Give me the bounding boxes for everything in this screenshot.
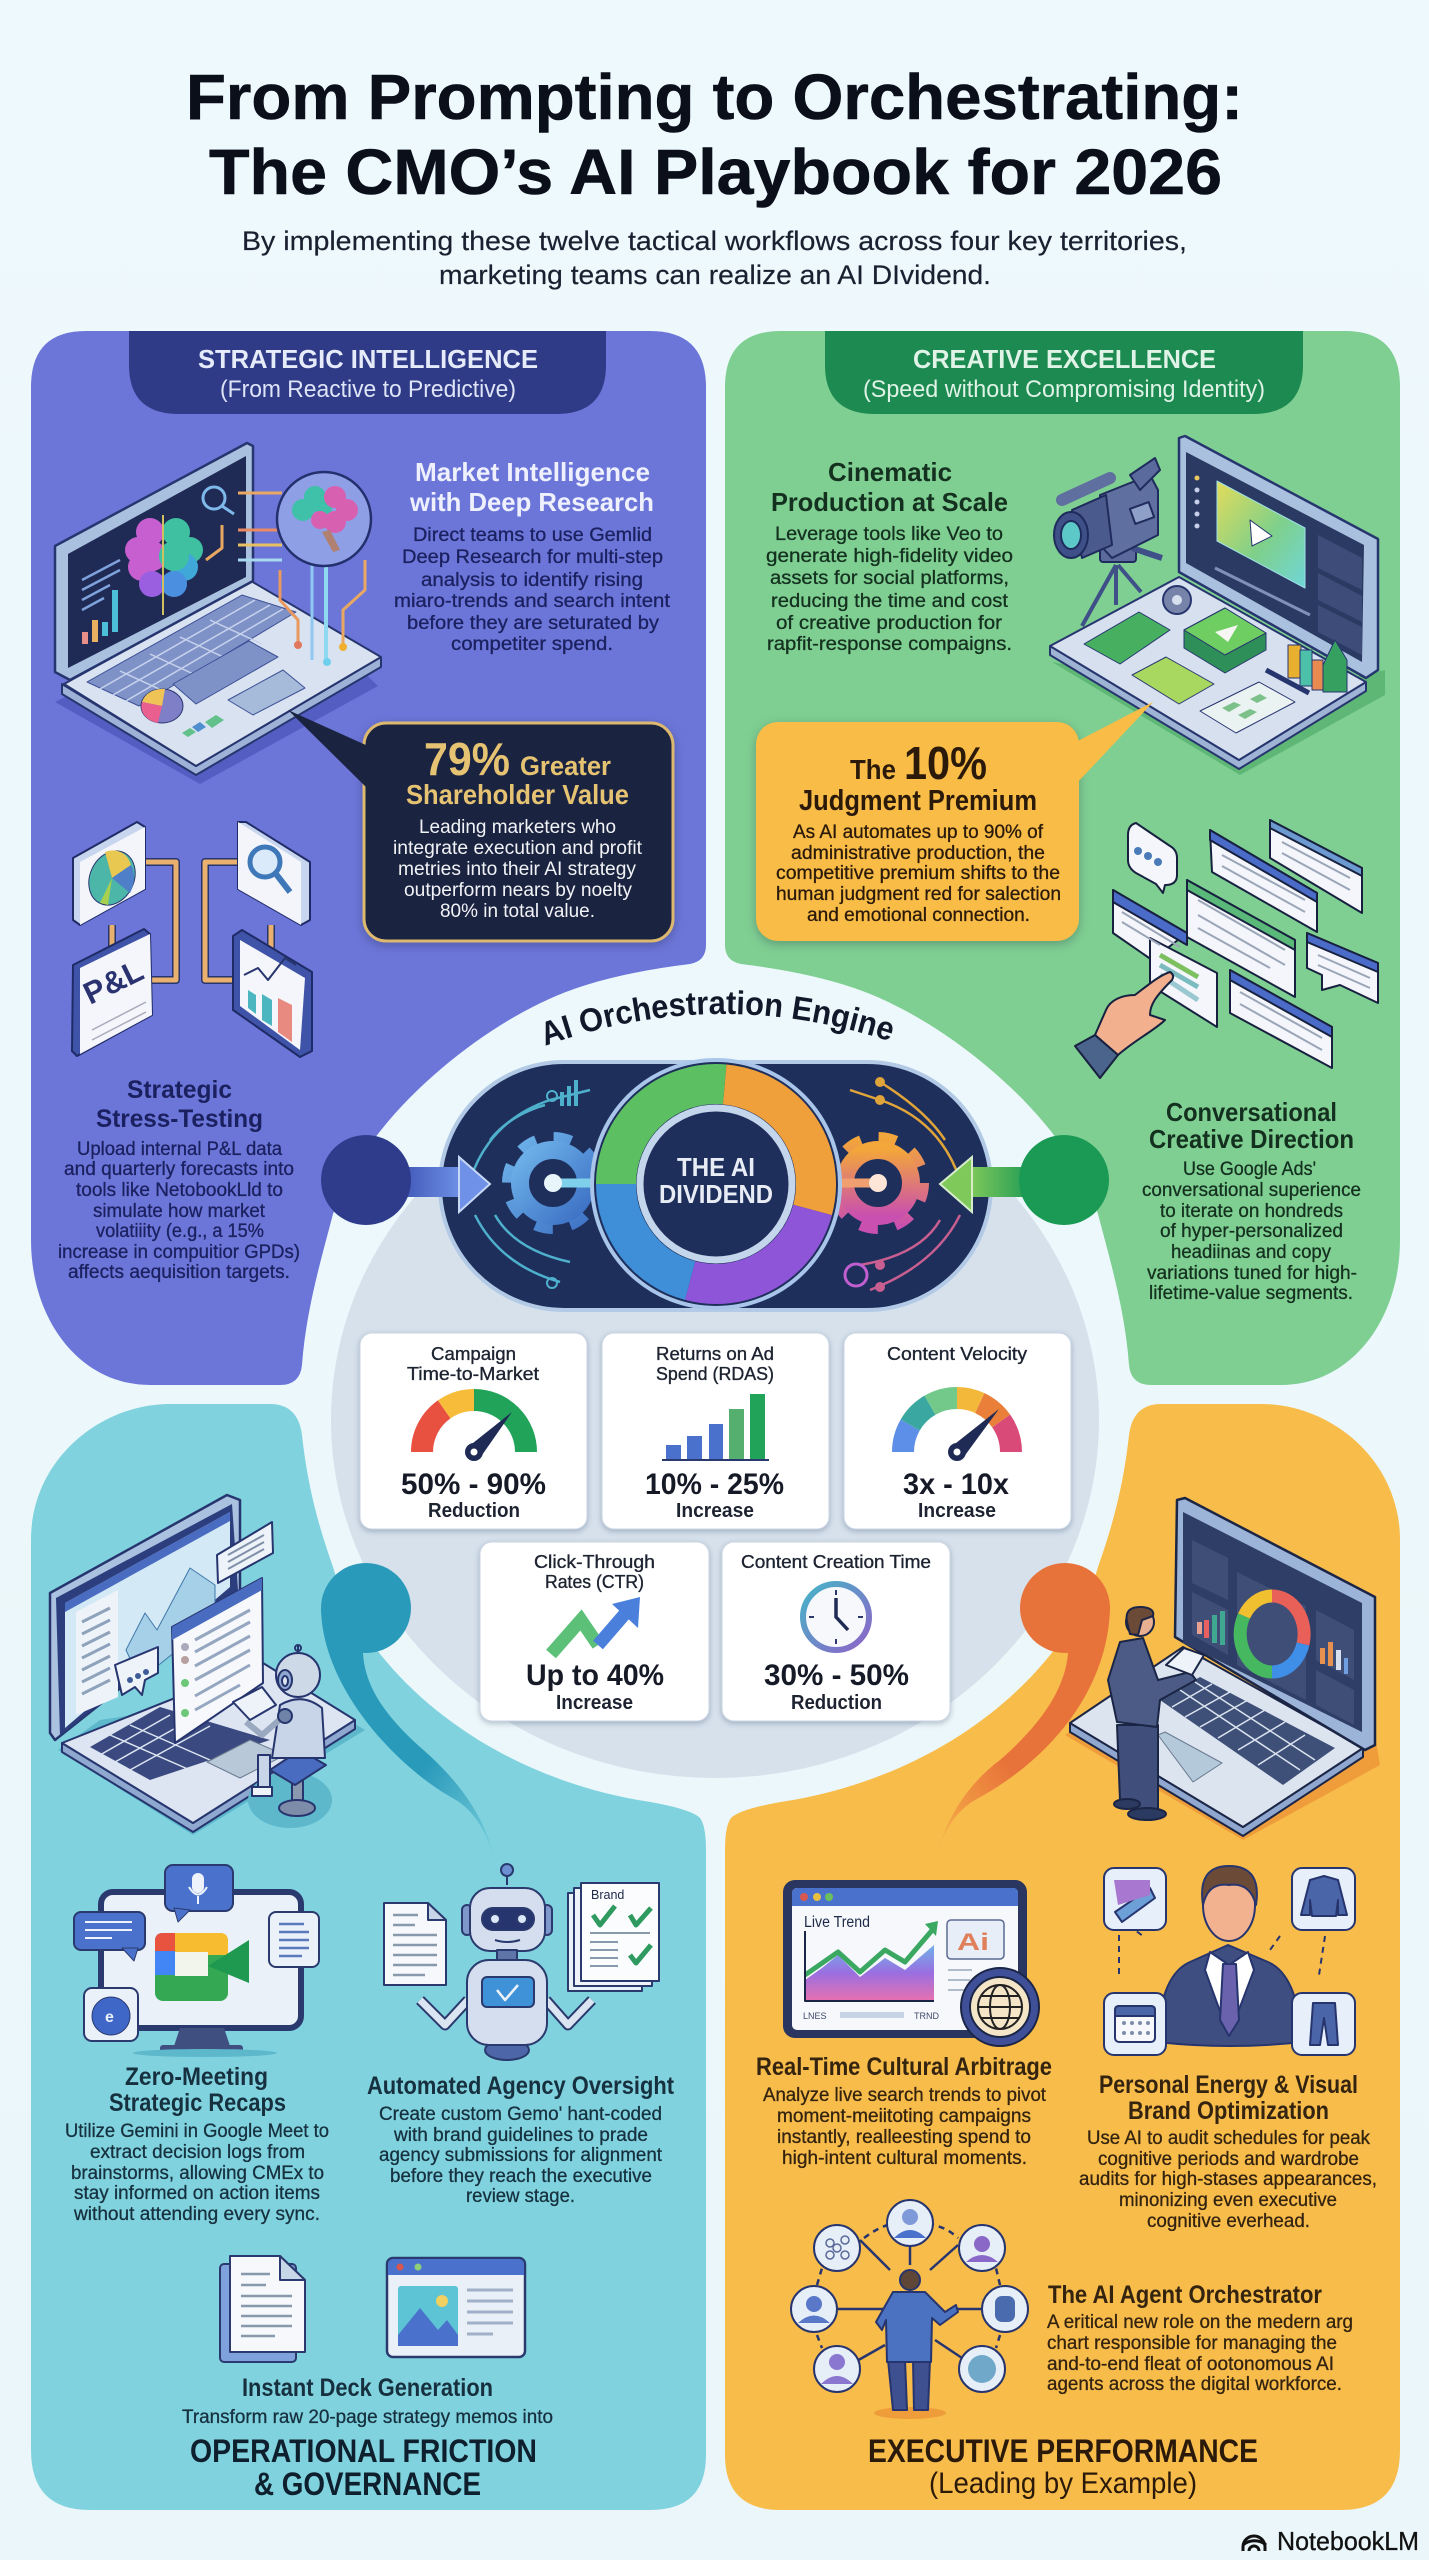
section: strategic stress-testing text: tools like NetobookLld to	[76, 1179, 283, 1201]
callout: 79% greater shareholder value: integrate execution and profit	[393, 838, 643, 859]
callout: 79% greater shareholder value: Shareholder Value	[406, 779, 629, 810]
stat card: content creation time: Content Creation Time	[741, 1552, 931, 1572]
ring: four-colour dividend ring: THE AI	[677, 1152, 755, 1182]
icon: P&L stress-testing network: P&L	[78, 953, 149, 1011]
icon: laptop with brain	[55, 443, 381, 784]
section: conversational creative direction text: conversational superience	[1142, 1179, 1361, 1201]
section: market intelligence text: analysis to identify rising	[421, 569, 643, 591]
section: ai agent orchestrator text	[1047, 2281, 1353, 2395]
icon: executive with schedule and wardrobe tiles	[1104, 1866, 1355, 2055]
panel: executive performance	[725, 1404, 1400, 2510]
section heading: operational friction: OPERATIONAL FRICTION	[190, 2433, 537, 2469]
icon: laptop with robot assistant	[50, 1495, 365, 1835]
section header: strategic intelligence	[129, 331, 606, 414]
section: instant deck generation text	[182, 2374, 553, 2428]
icon: live trend browser: TRND	[914, 2011, 939, 2021]
stat card: campaign time-to-market	[360, 1333, 587, 1529]
section header: creative excellence: CREATIVE EXCELLENCE	[913, 344, 1216, 374]
panel: strategic intelligence	[31, 331, 706, 1385]
section: zero-meeting strategic recaps text: Strategic Recaps	[109, 2089, 286, 2117]
stat card: content creation time: Reduction	[791, 1692, 882, 1714]
icon: live trend browser	[783, 1880, 1039, 2046]
callout: the 10% judgment premium: The	[850, 754, 896, 785]
section: real-time cultural arbitrage text: high-intent cultural moments.	[782, 2147, 1027, 2169]
section: conversational creative direction text: of hyper-personalized	[1160, 1220, 1343, 1242]
panel: creative excellence	[725, 331, 1400, 1385]
callout: the 10% judgment premium: and emotional connection.	[807, 905, 1030, 926]
stat card: content creation time	[722, 1542, 950, 1721]
section: ai agent orchestrator text: agents across the digital workforce.	[1047, 2373, 1342, 2395]
section: automated agency oversight text: review stage.	[466, 2185, 575, 2207]
section: ai agent orchestrator text: The AI Agent Orchestrator	[1048, 2281, 1322, 2309]
engine graphic: the AI dividend	[440, 1060, 991, 1310]
icon: video camera on tripod	[1054, 458, 1162, 626]
icon: P&L stress-testing network	[72, 822, 312, 1057]
section: conversational creative direction text	[1142, 1097, 1361, 1304]
section: conversational creative direction text: Creative Direction	[1149, 1124, 1354, 1154]
stat card: campaign time-to-market: Campaign	[431, 1344, 516, 1364]
section heading: executive performance: (Leading by Example)	[929, 2467, 1197, 2500]
section: conversational creative direction text: lifetime-value segments.	[1149, 1282, 1353, 1304]
section: personal energy text: Personal Energy & Visual	[1099, 2071, 1358, 2099]
icon: robot reviewing brand documents	[384, 1864, 659, 2060]
section: cinematic production text: rapfit-response compaigns.	[767, 633, 1012, 655]
ring: four-colour dividend ring	[592, 1060, 840, 1308]
callout: 79% greater shareholder value: 79%	[424, 733, 510, 785]
central circle: AI orchestration engine	[321, 990, 1109, 1778]
section: zero-meeting strategic recaps text: Zero-Meeting	[125, 2063, 268, 2091]
section: zero-meeting strategic recaps text: extract decision logs from	[90, 2141, 305, 2163]
callout: the 10% judgment premium: human judgment red for salection	[776, 884, 1061, 905]
section heading: operational friction: & GOVERNANCE	[254, 2466, 481, 2502]
section: automated agency oversight text: before they reach the executive	[390, 2165, 652, 2187]
section: conversational creative direction text: Conversational	[1166, 1097, 1337, 1127]
section: ai agent orchestrator text: and-to-end fleat of ootonomous AI	[1047, 2353, 1334, 2375]
section: cinematic production text: reducing the time and cost	[771, 590, 1009, 612]
callout: the 10% judgment premium: competitive premium shifts to the	[776, 863, 1060, 884]
section: market intelligence text: Market Intelligence	[415, 457, 650, 487]
stat card: campaign time-to-market: Time-to-Market	[407, 1364, 539, 1384]
section: market intelligence text: miaro-trends and search intent	[394, 590, 671, 612]
icon: video production laptop	[1050, 436, 1385, 775]
section: cinematic production text: of creative production for	[776, 612, 1003, 634]
section: market intelligence text: Deep Research for multi-step	[402, 546, 663, 568]
stat card: returns on ad spend: 10% - 25%	[645, 1468, 784, 1501]
section: market intelligence text: before they are seturated by	[407, 612, 659, 634]
section: conversational creative direction text: to iterate on hondreds	[1160, 1200, 1343, 1222]
section: automated agency oversight text	[367, 2072, 675, 2207]
section: ai agent orchestrator text: chart responsible for managing the	[1047, 2332, 1337, 2354]
section: instant deck generation text: Transform raw 20-page strategy memos into	[182, 2406, 553, 2428]
stat card: campaign time-to-market: Reduction	[428, 1500, 520, 1522]
icon: globe	[961, 1968, 1039, 2046]
section: zero-meeting strategic recaps text	[65, 2063, 329, 2225]
section: strategic stress-testing text: affects aequisition targets.	[68, 1261, 290, 1283]
stat card: returns on ad spend: Returns on Ad	[656, 1344, 774, 1364]
section: zero-meeting strategic recaps text: stay informed on action items	[74, 2182, 320, 2204]
section: strategic stress-testing text: and quarterly forecasts into	[64, 1158, 294, 1180]
stat card: content creation time: 30% - 50%	[764, 1659, 909, 1692]
section header: creative excellence	[825, 331, 1303, 414]
ring: four-colour dividend ring: DIVIDEND	[659, 1179, 773, 1209]
icon: robot reviewing brand documents: Brand	[591, 1888, 624, 1902]
icon: slide deck window	[387, 2258, 525, 2357]
section: strategic stress-testing text: simulate how market	[93, 1200, 266, 1222]
callout: 79% greater shareholder value: Leading marketers who	[419, 817, 616, 838]
icon: right gear	[812, 1139, 922, 1227]
section: conversational creative direction text: variations tuned for high-	[1147, 1262, 1357, 1284]
section: conversational creative direction text: Use Google Ads'	[1183, 1158, 1316, 1180]
subtitle	[242, 226, 1187, 290]
section: real-time cultural arbitrage text: instantly, realleesting spend to	[777, 2126, 1031, 2148]
stat card: returns on ad spend	[602, 1333, 829, 1529]
stat card: campaign time-to-market: 50% - 90%	[401, 1468, 546, 1501]
icon: google meet monitor	[74, 1865, 319, 2057]
icon: live trend browser: Ai	[957, 1929, 989, 1956]
stat card: click-through rates: Rates (CTR)	[545, 1572, 644, 1592]
heading: AI Orchestration Engine: AI Orchestration Engine	[546, 990, 892, 1046]
section: strategic stress-testing text: Upload internal P&L data	[77, 1138, 282, 1160]
callout: 79% greater shareholder value: Greater	[520, 751, 611, 781]
icon: memo document stack	[220, 2256, 305, 2362]
section: conversational creative direction text: headiinas and copy	[1171, 1241, 1331, 1263]
stat card: click-through rates	[480, 1542, 709, 1721]
panel: operational friction and governance	[31, 1404, 706, 2510]
title: From Prompting to Orchestrating:	[186, 61, 1243, 133]
section: automated agency oversight text: Create custom Gemo' hant-coded	[379, 2103, 662, 2125]
section header: strategic intelligence: (From Reactive to Predictive)	[220, 376, 516, 403]
section: zero-meeting strategic recaps text: brainstorms, allowing CMEx to	[71, 2162, 324, 2184]
stat card: content velocity: Increase	[918, 1500, 996, 1522]
section: zero-meeting strategic recaps text: Utilize Gemini in Google Meet to	[65, 2120, 329, 2142]
section: cinematic production text: Leverage tools like Veo to	[775, 523, 1003, 545]
icon: agent orchestrator network	[791, 2200, 1028, 2419]
section: cinematic production text: assets for social platforms,	[770, 567, 1009, 589]
title: The CMO’s AI Playbook for 2026	[209, 136, 1222, 208]
section: ai agent orchestrator text: A eritical new role on the medern arg	[1047, 2311, 1353, 2333]
section: market intelligence text: with Deep Research	[409, 487, 654, 517]
callout: the 10% judgment premium: Judgment Premium	[799, 785, 1037, 817]
subtitle: By implementing these twelve tactical workflows across four key territories,	[242, 226, 1187, 256]
section: personal energy text: cognitive everhead.	[1147, 2210, 1310, 2232]
section header: strategic intelligence: STRATEGIC INTELLIGENCE	[198, 344, 538, 374]
stat card: returns on ad spend: Increase	[676, 1500, 754, 1522]
section heading: executive performance	[868, 2433, 1258, 2500]
section: market intelligence text: Direct teams to use Gemlid	[413, 524, 652, 546]
section: personal energy text: audits for high-stases appearances,	[1079, 2168, 1377, 2190]
section: real-time cultural arbitrage text: moment-meiitoting campaigns	[777, 2105, 1031, 2127]
stat card: click-through rates: Increase	[556, 1692, 633, 1714]
section: personal energy text: Brand Optimization	[1128, 2097, 1329, 2125]
callout: the 10% judgment premium: 10%	[904, 737, 987, 789]
icon: ad copy windows with pointing hand	[1075, 820, 1378, 1078]
ribbon: orange connector	[934, 1563, 1110, 1865]
section: strategic stress-testing text: increase in compuitior GPDs)	[58, 1241, 300, 1263]
section: cinematic production text: Production at Scale	[771, 487, 1008, 517]
callout: 79% greater shareholder value: metries into their AI strategy	[398, 859, 636, 880]
subtitle: marketing teams can realize an AI DIvidend.	[439, 260, 991, 290]
callout: 79% greater shareholder value	[288, 710, 673, 941]
section heading: operational friction	[190, 2433, 537, 2502]
callout: 79% greater shareholder value: outperform nears by noelty	[404, 880, 632, 901]
section: real-time cultural arbitrage text: Analyze live search trends to pivot	[763, 2084, 1047, 2106]
icon: google meet monitor: e	[105, 2009, 114, 2026]
callout: the 10% judgment premium: As AI automates up to 90% of	[793, 822, 1044, 843]
section: instant deck generation text: Instant Deck Generation	[242, 2374, 493, 2402]
section: market intelligence text: competiter spend.	[451, 633, 613, 655]
section: strategic stress-testing text: volatiiity (e.g., a 15%	[96, 1220, 264, 1242]
section: strategic stress-testing text: Stress-Testing	[96, 1105, 263, 1133]
title	[186, 61, 1243, 208]
ribbon: teal connector	[321, 1563, 497, 1870]
section: automated agency oversight text: agency submissions for alignment	[379, 2144, 663, 2166]
section: real-time cultural arbitrage text	[756, 2053, 1052, 2169]
section: strategic stress-testing text: Strategic	[127, 1076, 232, 1104]
section: real-time cultural arbitrage text: Real-Time Cultural Arbitrage	[756, 2053, 1052, 2081]
section: cinematic production text: generate high-fidelity video	[766, 545, 1013, 567]
icon: standing analyst	[1108, 1607, 1204, 1820]
stat card: content velocity: 3x - 10x	[903, 1468, 1009, 1501]
section: market intelligence text	[394, 457, 671, 655]
icon: left gear	[509, 1139, 620, 1227]
icon: laptop with analyst	[1065, 1498, 1380, 1840]
icon: live trend browser: Live Trend	[804, 1914, 870, 1931]
section: cinematic production text: Cinematic	[828, 457, 952, 487]
section header: creative excellence: (Speed without Compromising Identity)	[863, 376, 1265, 403]
section: personal energy text: Use AI to audit schedules for peak	[1087, 2127, 1370, 2149]
callout: 79% greater shareholder value: 80% in total value.	[440, 901, 595, 922]
section: personal energy text	[1079, 2071, 1377, 2232]
section: zero-meeting strategic recaps text: without attending every sync.	[73, 2203, 320, 2225]
icon: brain on screen	[125, 515, 203, 615]
stat card: content velocity: Content Velocity	[887, 1344, 1027, 1364]
section: cinematic production text	[766, 457, 1013, 655]
icon: robot on stool	[233, 1645, 332, 1828]
section: automated agency oversight text: Automated Agency Oversight	[367, 2072, 675, 2100]
section heading: executive performance: EXECUTIVE PERFORMANCE	[868, 2433, 1258, 2469]
section: automated agency oversight text: with brand guidelines to prade	[393, 2124, 648, 2146]
arrow: strategic intelligence input	[321, 1135, 490, 1225]
logo: NotebookLM: NotebookLM	[1277, 2526, 1419, 2556]
icon: dashboard donut chart	[1240, 1596, 1304, 1672]
stat card: click-through rates: Up to 40%	[526, 1659, 664, 1692]
callout: the 10% judgment premium	[756, 702, 1153, 941]
section: strategic stress-testing text	[58, 1076, 300, 1283]
icon: brain in bubble	[277, 472, 371, 566]
arrow: creative excellence input	[940, 1135, 1109, 1225]
section: personal energy text: cognitive periods and wardrobe	[1098, 2148, 1359, 2170]
stat card: content velocity	[844, 1333, 1071, 1529]
stat card: returns on ad spend: Spend (RDAS)	[656, 1364, 774, 1384]
callout: the 10% judgment premium: administrative production, the	[791, 843, 1045, 864]
icon: live trend browser: LNES	[803, 2011, 827, 2021]
stat card: click-through rates: Click-Through	[534, 1552, 655, 1572]
section: personal energy text: minonizing even executive	[1119, 2189, 1337, 2211]
